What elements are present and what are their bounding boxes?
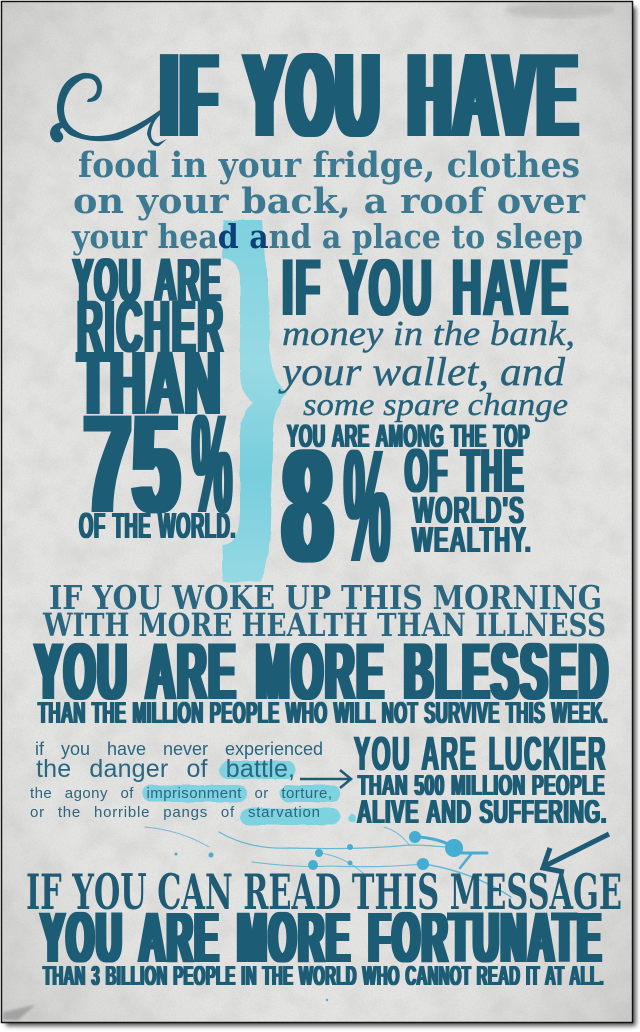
subtext: food clothes roof: food in your fridge, clothes: [78, 145, 580, 186]
left column: richer than 75%: 75: [85, 385, 182, 542]
ink splatter: [145, 827, 511, 1001]
flourish swirl: [50, 73, 167, 146]
right column: money and top 8%: [278, 243, 575, 595]
right column: money and top 8%: WORLD'S: [413, 490, 525, 532]
right column: money and top 8%: WEALTHY.: [412, 519, 532, 560]
luckier text block: [354, 728, 607, 831]
health section: [35, 578, 610, 730]
left column: richer than 75%: RICHER: [77, 285, 225, 368]
watercolor highlights behind battle text: [143, 761, 356, 825]
subtext: food clothes roof: your head and a place to sleep: [71, 217, 583, 256]
battle text block: if you have never experienced: [35, 739, 323, 759]
right column: money and top 8%: some spare change: [303, 386, 568, 422]
battle text block: [30, 739, 332, 821]
right column: money and top 8%: 8: [283, 416, 332, 595]
left column: richer than 75%: THAN: [78, 334, 222, 434]
left column: richer than 75%: YOU ARE: [73, 246, 222, 314]
subtext: food clothes roof: [71, 145, 586, 256]
right column: money and top 8%: your wallet, and: [278, 349, 566, 394]
closing section: read this message: [26, 863, 622, 991]
subtext: food clothes roof: on your back, a roof over: [73, 181, 586, 222]
infographic poster: %: [192, 385, 232, 542]
watercolor brace: [222, 220, 287, 582]
left column: richer than 75%: [73, 246, 236, 546]
right column: money and top 8%: money in the bank,: [282, 314, 575, 353]
battle text block: the agony of imprisonment or torture,: [30, 785, 332, 802]
left column: richer than 75%: OF THE WORLD.: [79, 505, 236, 546]
arrow to message: [543, 834, 609, 872]
battle text block: or the horrible pangs of starvation: [30, 804, 320, 821]
battle text block: the danger of battle,: [36, 755, 295, 783]
arrow to luckier: [300, 770, 351, 788]
right column: money and top 8%: %: [344, 416, 390, 595]
